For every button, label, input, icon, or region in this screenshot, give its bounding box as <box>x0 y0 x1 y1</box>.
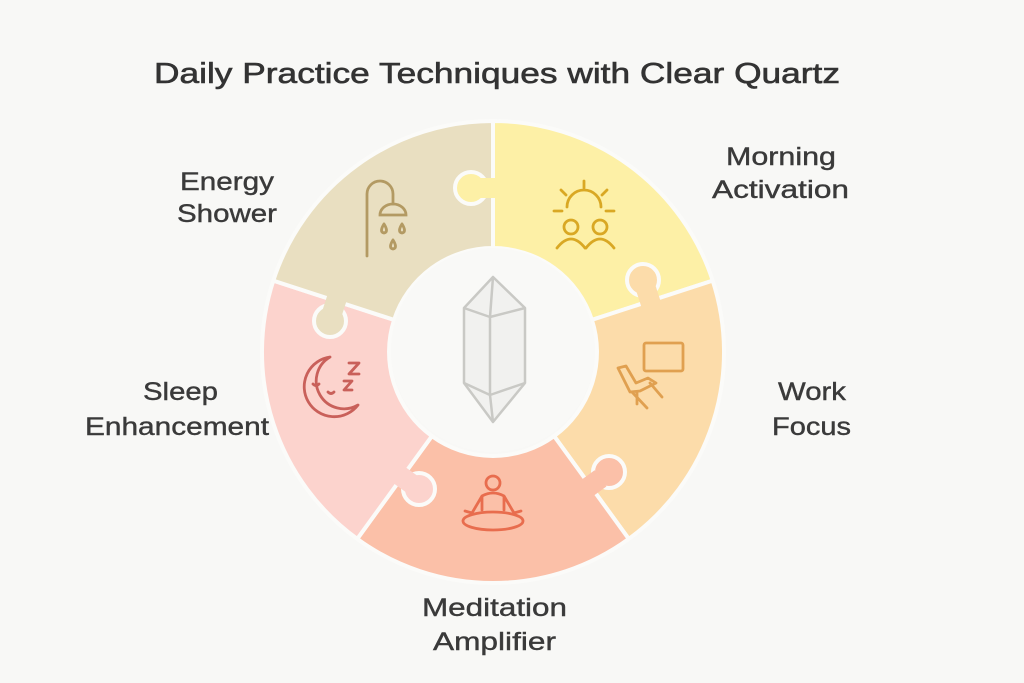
label: morning activation: Morning <box>726 143 836 171</box>
icon: crystal <box>464 277 525 422</box>
label: meditation amplifier: Meditation <box>422 594 567 622</box>
tabs <box>455 172 487 204</box>
label: work focus: Focus <box>772 413 851 441</box>
label: meditation amplifier <box>422 594 567 656</box>
label: sleep enhancement: Enhancement <box>85 413 269 441</box>
icon: sun and people <box>554 181 614 248</box>
label: sleep enhancement <box>85 378 269 441</box>
label: meditation amplifier: Amplifier <box>433 628 556 656</box>
label: morning activation: Activation <box>712 176 849 204</box>
label: energy shower: Shower <box>177 200 277 228</box>
label: sleep enhancement: Sleep <box>143 378 218 406</box>
icon: sleeping moon <box>304 357 359 417</box>
segment: work <box>554 281 724 539</box>
segment: sleep <box>262 281 432 539</box>
label: energy shower: Energy <box>180 168 275 196</box>
icon: work desk <box>618 343 683 408</box>
label: morning activation <box>712 143 849 204</box>
label: work focus <box>772 378 851 441</box>
segment: meditation <box>357 436 629 583</box>
icon: meditation <box>463 476 523 530</box>
tab necks <box>322 178 660 496</box>
puzzle ring <box>262 121 724 583</box>
segment: morning <box>493 121 713 320</box>
segment: energy <box>273 121 493 320</box>
center circle <box>391 248 595 452</box>
label: energy shower <box>177 168 277 228</box>
icon: shower <box>367 181 406 256</box>
title: Daily Practice Techniques with Clear Quartz <box>154 58 840 90</box>
label: work focus: Work <box>778 378 847 406</box>
